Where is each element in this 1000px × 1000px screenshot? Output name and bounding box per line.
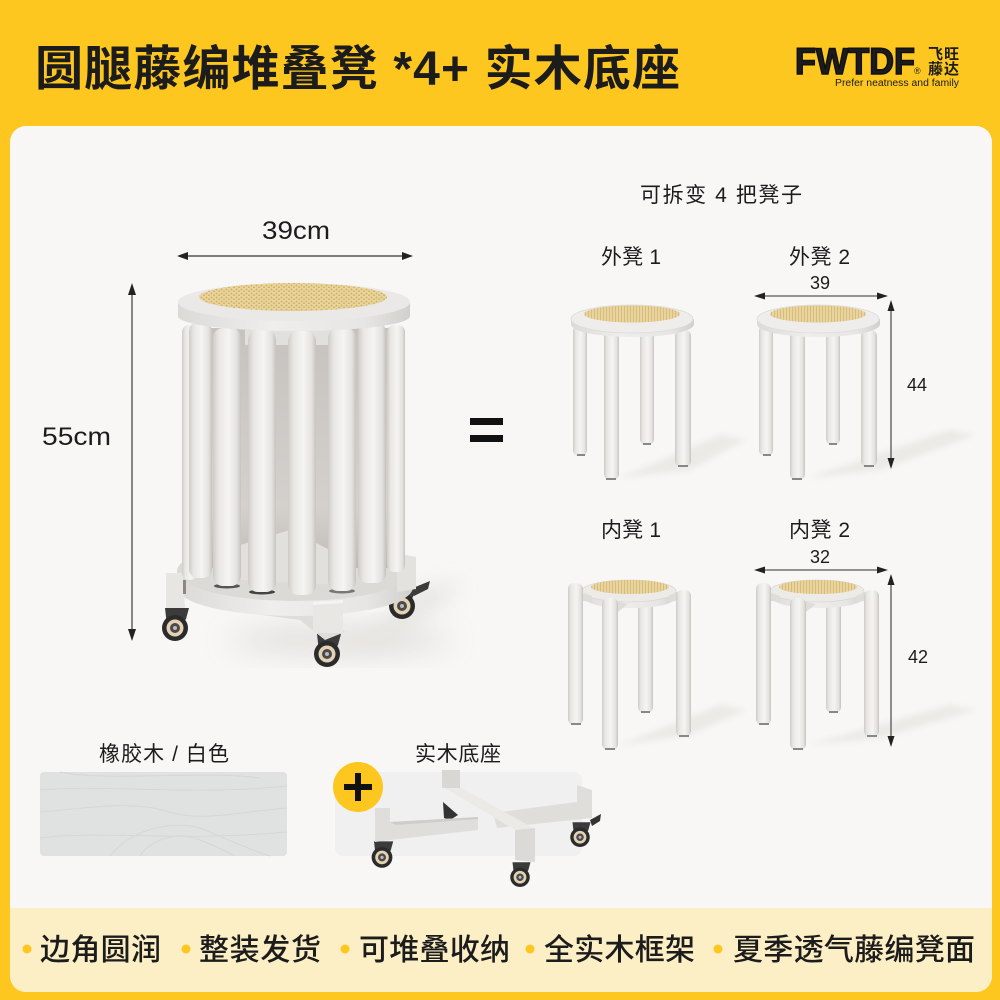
cross frame bbox=[375, 770, 592, 862]
inner stool 2: 内凳 2 bbox=[789, 519, 850, 542]
logo: FWTDF bbox=[795, 41, 959, 89]
feature: 边角圆润: 边角圆润 bbox=[40, 934, 161, 967]
logo: FWTDF: 飞旺 bbox=[928, 46, 959, 63]
dimension: height 55cm: 55cm bbox=[42, 423, 111, 451]
logo: FWTDF: FWTDF bbox=[795, 41, 915, 82]
feature strip bbox=[10, 908, 992, 992]
title: 圆腿藤编堆叠凳 *4+ 实木底座 bbox=[35, 43, 680, 96]
material swatch bbox=[40, 743, 287, 856]
dimension: height 55cm bbox=[42, 283, 136, 641]
round seat bbox=[178, 283, 410, 331]
logo: FWTDF: ® bbox=[914, 66, 921, 76]
feature: 夏季透气藤编凳面: 夏季透气藤编凳面 bbox=[733, 934, 975, 967]
outer stool 1: 外凳 1 bbox=[601, 246, 661, 269]
material swatch: 橡胶木 / 白色 bbox=[99, 743, 229, 766]
inner base struts bbox=[240, 330, 350, 585]
dimensions: outer stool bbox=[754, 273, 927, 469]
dimensions: inner stool: 42 bbox=[908, 647, 928, 667]
logo: FWTDF: Prefer neatness and family bbox=[835, 78, 959, 89]
feature: 可堆叠收纳: 可堆叠收纳 bbox=[359, 934, 510, 967]
feature: 整装发货: 整装发货 bbox=[199, 934, 321, 967]
outer stool 1 bbox=[571, 246, 694, 480]
wooden base bbox=[166, 541, 416, 640]
dimensions: outer stool: 39 bbox=[810, 273, 830, 293]
casters of base bbox=[372, 802, 601, 887]
dimensions: outer stool: 44 bbox=[907, 375, 927, 395]
solid wood base bbox=[335, 743, 601, 887]
inner stool 1: 内凳 1 bbox=[601, 519, 661, 542]
soft floor shadows bbox=[230, 430, 975, 745]
outer stool 2 bbox=[757, 246, 880, 480]
inner stool 2 bbox=[756, 519, 879, 750]
casters bbox=[162, 581, 430, 667]
heading: 可拆变 4 把凳子: 可拆变 4 把凳子 bbox=[640, 184, 802, 207]
solid wood base: 实木底座 bbox=[415, 743, 501, 766]
outer stool 2: 外凳 2 bbox=[789, 246, 850, 269]
dimensions: inner stool: 32 bbox=[810, 547, 830, 567]
dimensions: inner stool bbox=[754, 547, 928, 747]
equals sign bbox=[470, 418, 503, 442]
logo: FWTDF: 藤达 bbox=[928, 60, 959, 78]
dimension: width 39cm: 39cm bbox=[262, 217, 330, 245]
plus badge bbox=[333, 762, 383, 812]
inner stool 1 bbox=[568, 519, 691, 750]
legs bbox=[189, 322, 386, 595]
front leg of base block bbox=[313, 600, 343, 633]
feature: 全实木框架: 全实木框架 bbox=[544, 934, 695, 967]
main stacked stool with base bbox=[162, 283, 430, 667]
dimension: width 39cm bbox=[177, 217, 413, 260]
cavity bbox=[189, 328, 394, 568]
